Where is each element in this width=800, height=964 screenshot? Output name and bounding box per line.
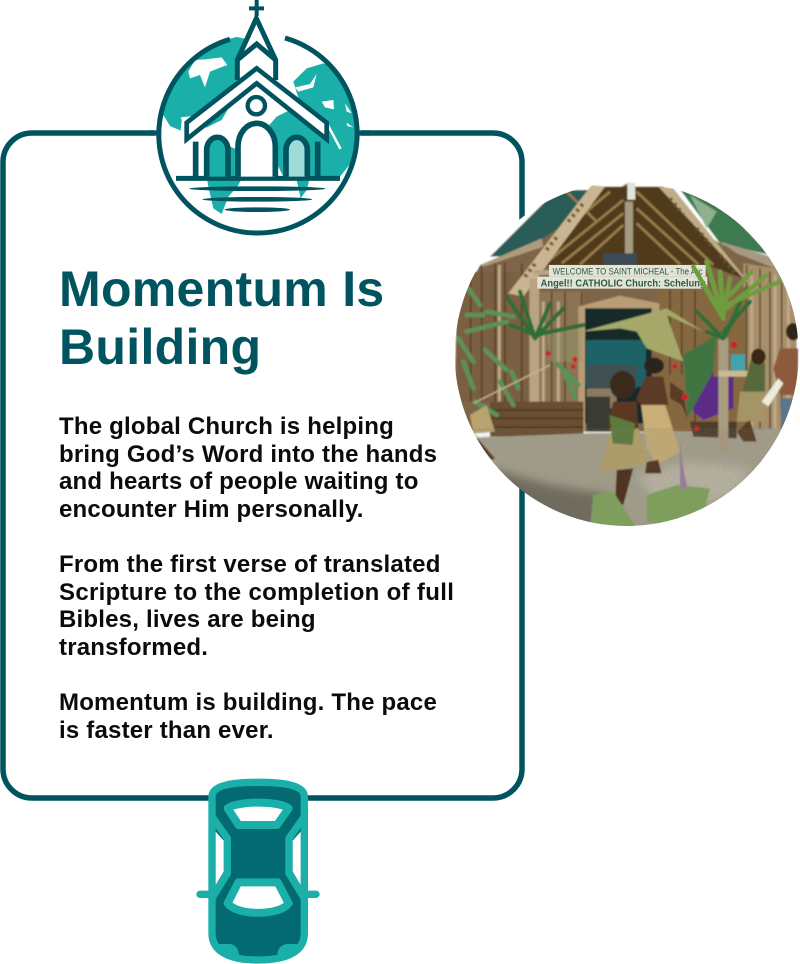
walls (453, 183, 800, 432)
paragraph: momentum: Momentum is building. The pace (59, 689, 437, 716)
altar (690, 377, 733, 420)
paragraph: translated Scripture: From the first verse of translated (59, 551, 441, 578)
paragraph: translated Scripture (59, 551, 454, 660)
photo: villagers entering a thatched church: WELCOME TO SAINT MICHEAL - The Arc (553, 267, 703, 277)
paragraph: translated Scripture: Scripture to the completion of full (59, 578, 454, 606)
paragraph: momentum: is faster than ever. (59, 716, 274, 744)
door (578, 296, 659, 432)
hanging leaves (582, 308, 703, 362)
paragraph: global Church (59, 413, 437, 522)
thatch (547, 186, 742, 278)
photo: villagers entering a thatched church: Angel!! CATHOLIC Church: Schelung (541, 279, 706, 290)
ground (476, 428, 782, 526)
foreground plants (590, 485, 710, 528)
title: Momentum Is (59, 261, 385, 317)
paragraph: global Church: bring God’s Word into the hands (59, 440, 437, 468)
second child (641, 399, 680, 465)
palms (507, 288, 750, 338)
left tree (458, 288, 578, 415)
paragraph: translated Scripture: transformed. (59, 634, 208, 660)
church globe icon (150, 0, 370, 236)
gravel texture (472, 428, 782, 526)
title (59, 261, 385, 375)
sign (549, 265, 706, 277)
paragraph: global Church: encounter Him personally. (59, 496, 364, 522)
eaves (480, 238, 543, 267)
paragraph: global Church: and hearts of people waiting to (59, 468, 419, 495)
man (773, 348, 798, 395)
paragraph: momentum (59, 689, 437, 744)
photo: villagers entering a thatched church (454, 182, 799, 526)
paragraph: global Church: The global Church is helping (59, 413, 394, 440)
flowers (546, 342, 737, 431)
title: Building (59, 319, 261, 375)
low wall (490, 402, 583, 437)
third child (742, 358, 766, 392)
paragraph: translated Scripture: Bibles, lives are being (59, 606, 316, 633)
first child (607, 402, 638, 428)
